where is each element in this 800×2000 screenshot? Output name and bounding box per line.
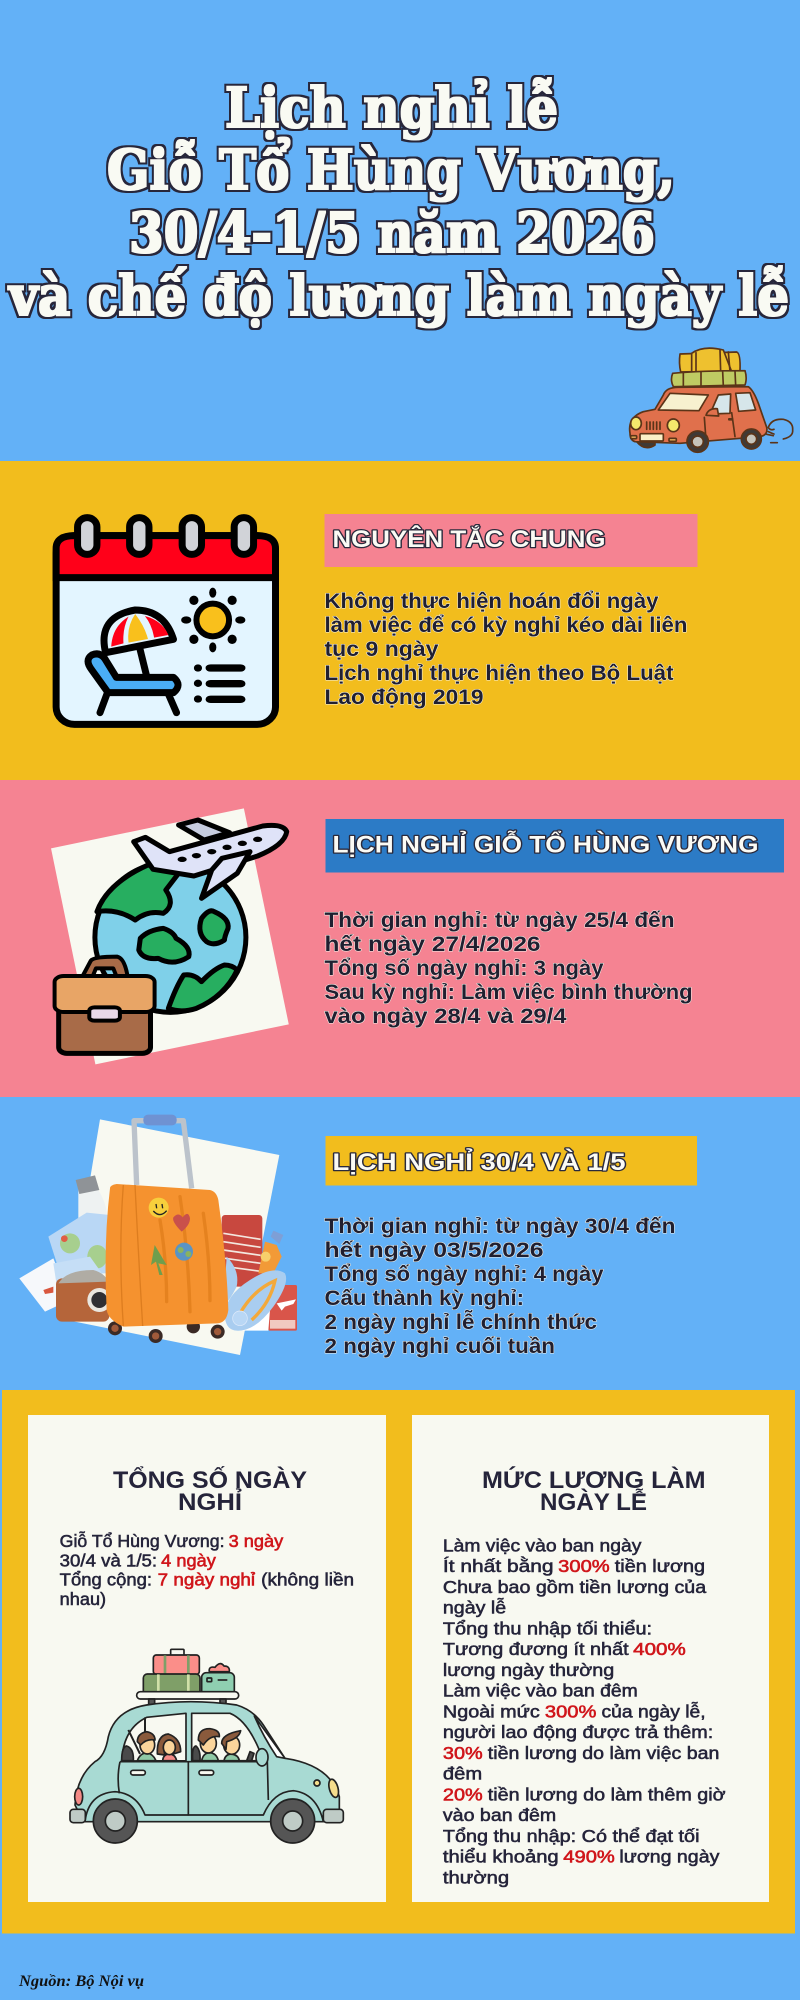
heading: nguyên tắc chung [324,514,698,567]
panel: nguyên tắc chung [0,461,800,780]
text block: mức lương: tiền lương do làm thêm giờ [488,1784,726,1804]
text block: lịch nghỉ giỗ tổ [324,909,692,1028]
heading: lịch nghỉ 30/4 và 1/5 [326,1136,697,1186]
heading: mức lương làm ngày lễ [482,1466,706,1516]
text block: mức lương: người lao động được trả thêm: [443,1722,713,1742]
text block: nguyên tắc chung: Lịch nghỉ thực hiện theo Bộ Luật [324,662,674,685]
text block: số ngày nghỉ: nhau) [60,1589,106,1609]
text block: mức lương: của ngày lễ, [602,1700,706,1722]
text block: mức lương: 20% [443,1784,483,1804]
text block: mức lương: Tổng thu nhập: Có thể đạt tối [443,1826,700,1846]
text block: số ngày nghỉ: 4 ngày [161,1550,216,1570]
text block: nguyên tắc chung: Lao động 2019 [324,686,484,709]
text block: mức lương: 490% [563,1847,615,1867]
heading: nguyên tắc chung: NGUYÊN TẮC CHUNG [332,525,606,553]
text block: mức lương: 300% [545,1702,596,1722]
text block: mức lương: 300% [558,1556,610,1576]
panel: lịch nghỉ 30/4 và 1/5 [19,1115,697,1358]
text block: số ngày nghỉ: Giỗ Tổ Hùng Vương: [60,1530,225,1551]
text block: nguyên tắc chung [324,590,688,709]
text block: số ngày nghỉ: (không liền [261,1570,354,1590]
source note: Nguồn: Bộ Nội vụ [18,1973,144,1990]
text block: mức lương: ngày lễ [443,1597,506,1618]
heading: tổng số ngày nghỉ [113,1466,307,1516]
heading: mức lương làm ngày lễ: MỨC LƯƠNG LÀM [482,1466,706,1494]
text block: lịch nghỉ 30/4 và 1/5: Tổng số ngày nghỉ: 4 ngày [324,1263,604,1286]
text block: lịch nghỉ 30/4 và 1/5 [324,1215,676,1358]
title: 30/4-1/5 năm 2026 [129,200,655,265]
text block: mức lương: Làm việc vào ban ngày [443,1536,642,1556]
text block: lịch nghỉ giỗ tổ: hết ngày 27/4/2026 [324,933,540,956]
icon: globe, plane and briefcase [51,808,289,1064]
text block: số ngày nghỉ: 7 ngày nghỉ [158,1570,255,1590]
text block: nguyên tắc chung: tục 9 ngày [324,638,439,661]
text block: nguyên tắc chung: Không thực hiện hoán đổi ngày [324,590,659,613]
text block: lịch nghỉ 30/4 và 1/5: Thời gian nghỉ: từ ngày 30/4 đến [324,1215,676,1238]
text block: mức lương: vào ban đêm [443,1805,556,1825]
text block: mức lương: đêm [443,1764,482,1784]
text block: nguyên tắc chung: làm việc để có kỳ nghỉ kéo dài liên [324,614,688,637]
text block: số ngày nghỉ [60,1530,354,1609]
text block: lịch nghỉ giỗ tổ: Thời gian nghỉ: từ ngày 25/4 đến [324,909,674,932]
icon: calendar with beach chair [56,518,276,724]
text block: số ngày nghỉ: 30/4 và 1/5: [60,1550,157,1570]
text block: mức lương: Ít nhất bằng [443,1555,554,1576]
heading: lịch nghỉ 30/4 và 1/5: LỊCH NGHỈ 30/4 VÀ 1/5 [332,1147,626,1176]
text block: lịch nghỉ 30/4 và 1/5: 2 ngày nghỉ cuối tuần [324,1335,555,1358]
heading: mức lương làm ngày lễ: NGÀY LỄ [540,1487,647,1516]
text block: mức lương: 30% [443,1743,483,1763]
panel: lịch nghỉ giỗ tổ [0,780,800,1097]
text block: số ngày nghỉ: Tổng cộng: [60,1570,152,1590]
text block: lịch nghỉ 30/4 và 1/5: hết ngày 03/5/2026 [324,1239,544,1262]
icon: orange suitcase with travel items [19,1115,297,1355]
heading: tổng số ngày nghỉ: NGHỈ [178,1487,242,1516]
text block: lịch nghỉ giỗ tổ: Sau kỳ nghỉ: Làm việc bình thường [324,981,692,1004]
text block: mức lương: 400% [633,1639,686,1659]
text block: mức lương: lương ngày [619,1847,720,1867]
text block: lịch nghỉ giỗ tổ: vào ngày 28/4 và 29/4 [324,1005,567,1028]
text block: mức lương: Tương đương ít nhất [443,1639,629,1659]
text block: lịch nghỉ 30/4 và 1/5: Cấu thành kỳ nghỉ: [324,1287,524,1310]
text block: mức lương: Làm việc vào ban đêm [443,1681,638,1701]
text block: mức lương [443,1536,726,1888]
panel: tổng số ngày nghỉ [28,1415,386,1902]
text block: số ngày nghỉ: 3 ngày [229,1531,283,1551]
heading: lịch nghỉ giỗ tổ hùng vương [326,819,784,872]
panel: mức lương làm ngày lễ [412,1415,769,1902]
text block: mức lương: thường [443,1868,509,1888]
text block: mức lương: Tổng thu nhập tối thiểu: [443,1618,652,1638]
icon: family car with luggage [70,1649,343,1843]
text block: mức lương: tiền lương [615,1556,705,1576]
text block: mức lương: Chưa bao gồm tiền lương của [443,1577,706,1597]
text block: mức lương: lương ngày thường [443,1660,614,1680]
text block: mức lương: Ngoài mức [443,1702,540,1722]
icon: orange car with luggage [630,348,793,452]
title [8,75,789,328]
text block: mức lương: tiền lương do làm việc ban [488,1743,719,1763]
title: Giỗ Tổ Hùng Vương, [107,137,675,202]
text block: lịch nghỉ 30/4 và 1/5: 2 ngày nghỉ lễ chính thức [324,1310,597,1334]
panel: tổng kết [2,1390,795,1934]
title: Lịch nghỉ lễ [225,75,558,140]
text block: mức lương: thiểu khoảng [443,1847,559,1867]
text block: lịch nghỉ giỗ tổ: Tổng số ngày nghỉ: 3 ngày [324,957,604,980]
heading: tổng số ngày nghỉ: TỔNG SỐ NGÀY [113,1466,307,1494]
heading: lịch nghỉ giỗ tổ hùng vương: LỊCH NGHỈ GIỖ TỔ HÙNG VƯƠNG [332,830,758,858]
